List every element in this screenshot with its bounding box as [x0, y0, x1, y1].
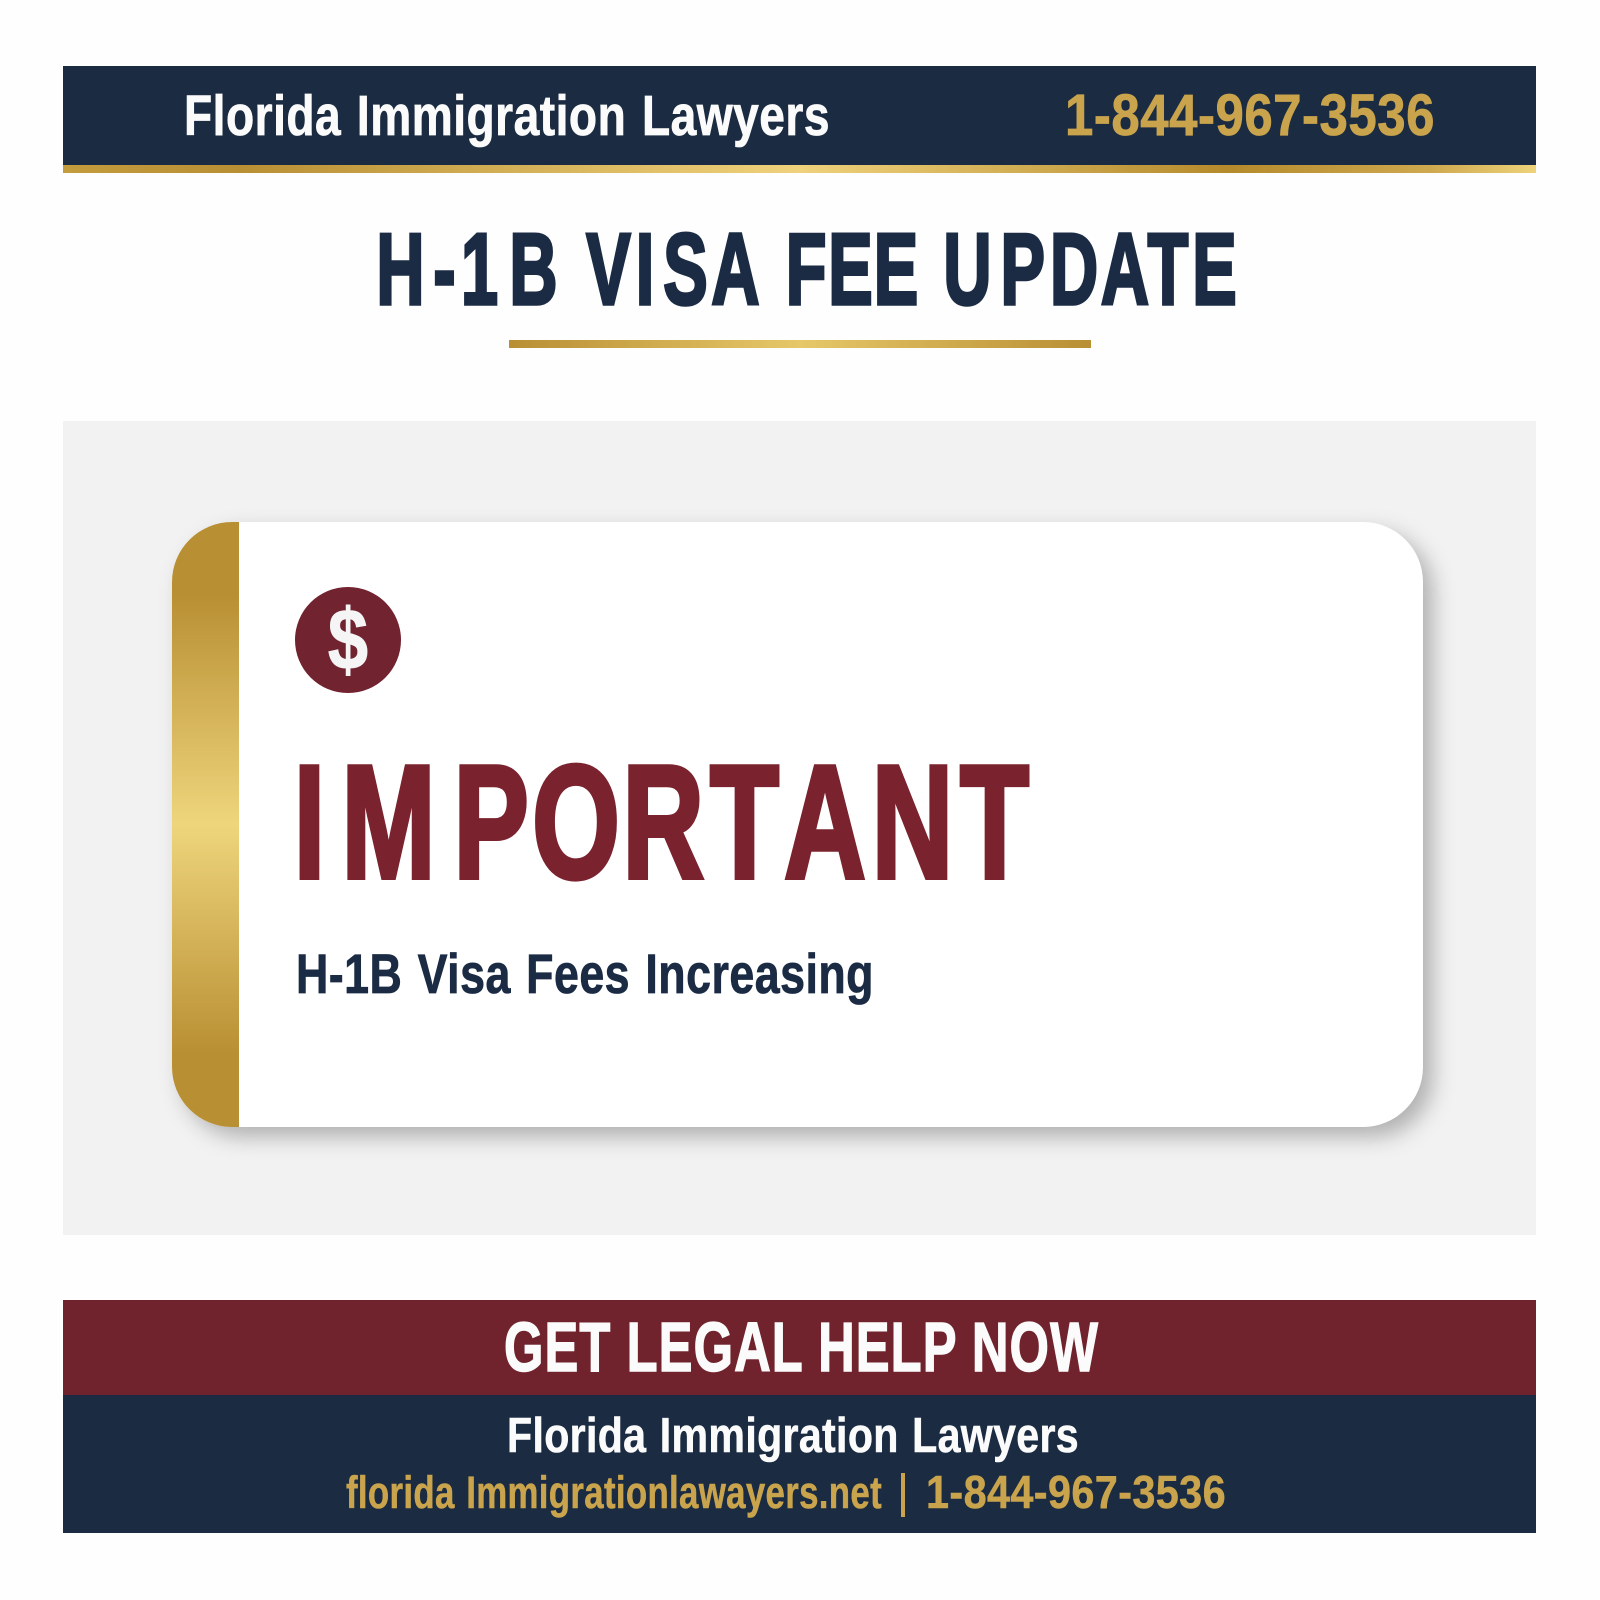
panel: white notice card: [172, 522, 1423, 1127]
important heading: IMPORTANT: [294, 733, 1029, 912]
title: H-1B VISA FEE UPDATE: [376, 214, 1237, 326]
footer firm name: Florida Immigration Lawyers: [507, 1409, 1079, 1463]
header gold rule: [63, 165, 1536, 173]
footer website and phone: 1-844-967-3536: [926, 1466, 1226, 1518]
footer contact bar: [63, 1395, 1536, 1533]
panel: notice background: [63, 421, 1536, 1235]
footer website and phone: florida Immigrationlawayers.net: [346, 1467, 882, 1518]
title gold underline: [509, 340, 1091, 348]
icon: dollar sign: [295, 587, 401, 693]
header firm name: Florida Immigration Lawyers: [184, 84, 830, 148]
call to action text: GET LEGAL HELP NOW: [504, 1308, 1099, 1386]
subheading: H-1B Visa Fees Increasing: [296, 942, 874, 1005]
card shadow: [182, 532, 1433, 1137]
header bar: [63, 66, 1536, 173]
icon: dollar sign: $: [328, 591, 368, 687]
call to action bar: [63, 1300, 1536, 1395]
gold side band: [172, 522, 239, 1127]
header phone number: 1-844-967-3536: [1065, 83, 1435, 148]
